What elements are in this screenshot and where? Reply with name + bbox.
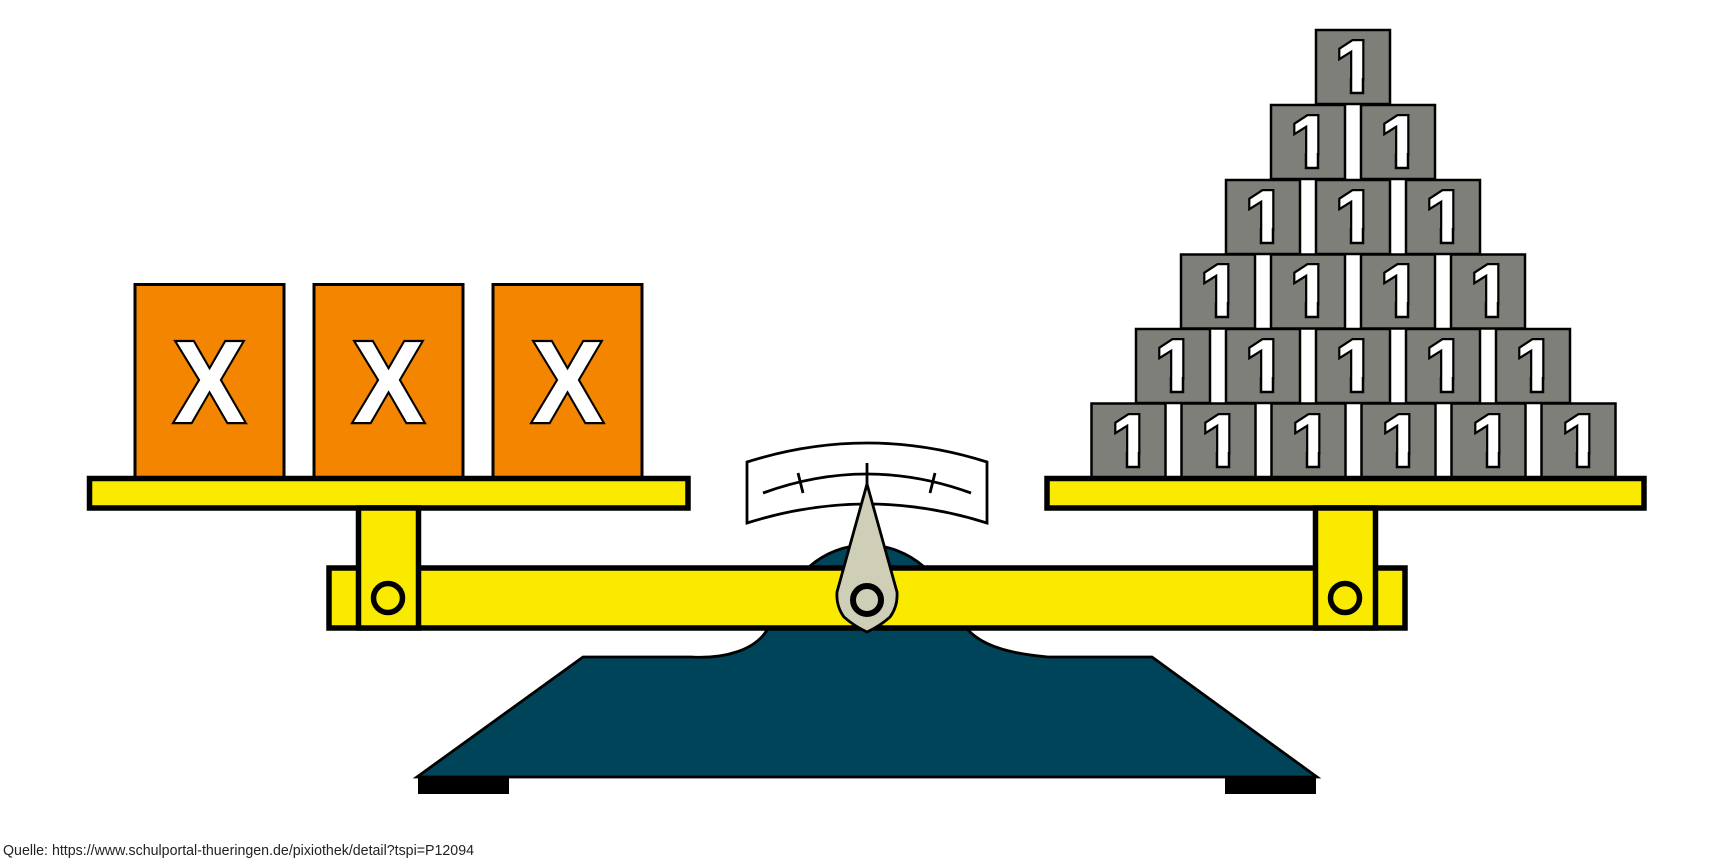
left weights: three x boxes: X <box>353 317 424 447</box>
right weights: pyramid of 21 unit boxes: 1 <box>1245 326 1286 406</box>
right weights: pyramid of 21 unit boxes: 1 <box>1561 401 1602 481</box>
right weights: pyramid of 21 unit boxes: 1 <box>1290 102 1331 182</box>
right weights: pyramid of 21 unit boxes <box>1092 27 1616 481</box>
needle with pivot <box>837 484 897 632</box>
right weights: pyramid of 21 unit boxes: 1 <box>1470 251 1511 331</box>
right weights: pyramid of 21 unit boxes: 1 <box>1201 401 1242 481</box>
right weights: pyramid of 21 unit boxes: 1 <box>1200 251 1241 331</box>
right weights: pyramid of 21 unit boxes: 1 <box>1335 177 1376 257</box>
right weights: pyramid of 21 unit boxes: 1 <box>1155 326 1196 406</box>
right weights: pyramid of 21 unit boxes: 1 <box>1381 401 1422 481</box>
right weights: pyramid of 21 unit boxes: 1 <box>1291 401 1332 481</box>
right platform <box>1047 478 1644 508</box>
left weights: three x boxes: X <box>174 317 245 447</box>
right weights: pyramid of 21 unit boxes: 1 <box>1245 177 1286 257</box>
right weights: pyramid of 21 unit boxes: 1 <box>1515 326 1556 406</box>
right weights: pyramid of 21 unit boxes: 1 <box>1380 102 1421 182</box>
scale base <box>417 545 1317 794</box>
source credit: Quelle: https://www.schulportal-thueringen.de/pixiothek/detail?tspi=P12094 <box>3 843 474 859</box>
dial with scale and ticks <box>747 443 987 523</box>
right hanger with pivot <box>1316 508 1376 628</box>
right weights: pyramid of 21 unit boxes: 1 <box>1471 401 1512 481</box>
right weights: pyramid of 21 unit boxes: 1 <box>1335 326 1376 406</box>
right weights: pyramid of 21 unit boxes: 1 <box>1425 177 1466 257</box>
right weights: pyramid of 21 unit boxes: 1 <box>1380 251 1421 331</box>
left hanger with pivot <box>358 508 418 628</box>
left weights: three x boxes: X <box>532 317 603 447</box>
left weights: three x boxes <box>135 284 642 478</box>
beam <box>329 568 1405 628</box>
right weights: pyramid of 21 unit boxes: 1 <box>1290 251 1331 331</box>
right weights: pyramid of 21 unit boxes: 1 <box>1335 27 1376 107</box>
right weights: pyramid of 21 unit boxes: 1 <box>1111 401 1152 481</box>
right weights: pyramid of 21 unit boxes: 1 <box>1425 326 1466 406</box>
left platform <box>90 478 688 508</box>
